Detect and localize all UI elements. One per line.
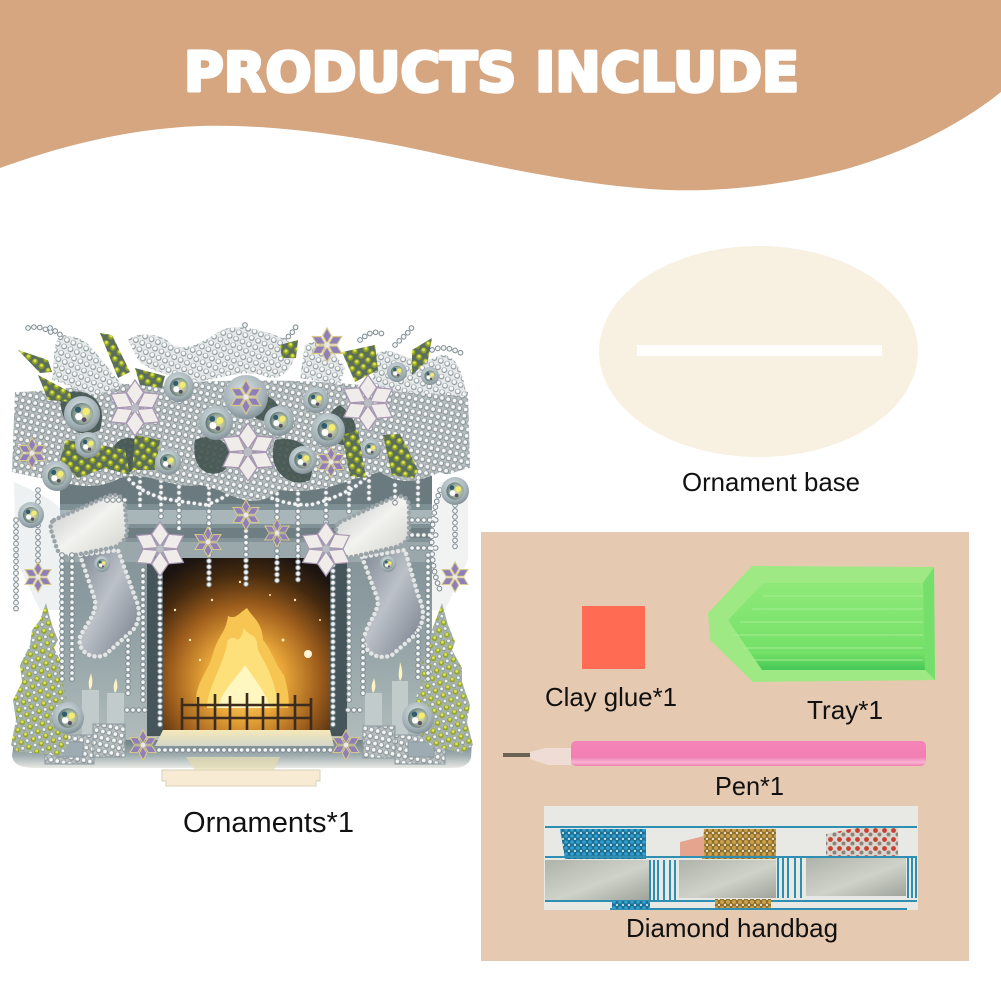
silver bead clusters (52, 327, 466, 396)
silver labels (545, 860, 649, 900)
side haze (14, 482, 62, 610)
blue stripes (545, 827, 917, 909)
clay glue (582, 606, 645, 669)
label: clay glue: Clay glue*1 (545, 682, 677, 712)
panel: accessories (481, 532, 969, 961)
baubles (18, 362, 469, 734)
stocking left (51, 495, 139, 656)
candles (82, 662, 408, 748)
mantel body (60, 470, 432, 755)
bead chains (16, 325, 465, 750)
label: tray: Tray*1 (807, 695, 883, 725)
stocking right (336, 496, 423, 657)
dark foliage patches (60, 390, 356, 483)
white crystal flowers (106, 375, 397, 576)
diamond handbag (544, 806, 918, 910)
title: PRODUCTS INCLUDE (184, 41, 799, 104)
floor reflection (186, 757, 280, 770)
flames (196, 608, 289, 708)
red gems (826, 828, 898, 858)
blue gems (560, 829, 646, 859)
acrylic stand (162, 770, 320, 786)
purple crystal flowers (17, 328, 470, 760)
label: pen: Pen*1 (715, 771, 784, 801)
fire grate (182, 693, 311, 730)
plastic bag (544, 806, 918, 910)
base plinth (12, 740, 472, 768)
label: ornament base: Ornament base (682, 467, 860, 497)
green bead clusters (18, 333, 432, 478)
dark recess beside firebox (147, 556, 164, 736)
pen (503, 741, 926, 766)
garland (12, 327, 470, 760)
tray (708, 566, 935, 682)
garland backing (12, 380, 470, 501)
header banner (0, 0, 1001, 190)
ornament: fireplace (11, 325, 473, 786)
firebox (163, 558, 330, 730)
ornament base (599, 246, 918, 457)
tree left (11, 603, 70, 755)
base disc (599, 246, 918, 457)
tree right (415, 603, 473, 753)
gifts (45, 724, 445, 764)
label: diamond handbag: Diamond handbag (626, 913, 838, 943)
base slot (637, 345, 882, 356)
sparks (174, 581, 321, 661)
hearth floor (155, 730, 334, 746)
gold gems (702, 829, 776, 859)
label: ornaments: Ornaments*1 (183, 807, 354, 839)
mantel top stripes (60, 472, 432, 562)
